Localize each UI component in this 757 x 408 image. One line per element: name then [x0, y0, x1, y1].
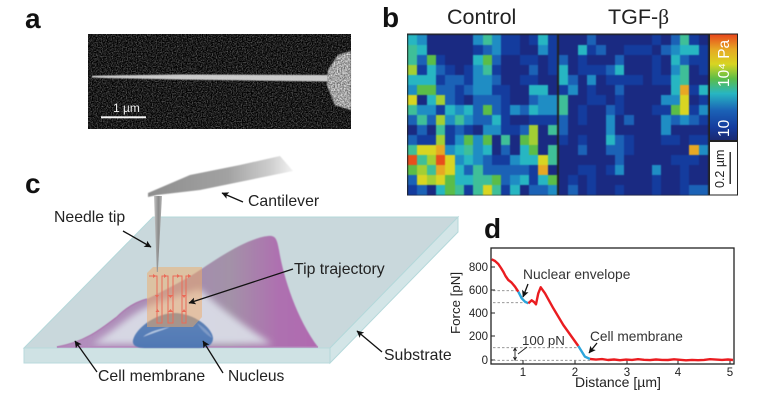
x tick labels: 3: [624, 367, 630, 379]
axis ticks: [491, 267, 730, 364]
heading TGF-β: TGF-β: [608, 5, 669, 29]
y tick labels: 600: [469, 285, 488, 297]
scan volume box: [147, 267, 202, 327]
y tick labels: 800: [469, 262, 488, 274]
panel label b: b: [382, 2, 399, 33]
colour bar: [710, 34, 737, 140]
nucleus: [133, 313, 213, 348]
scale bar 1 µm: 1 µm: [113, 101, 140, 115]
arrow: nuclear envelope: [523, 284, 528, 297]
arrow: cantilever: [222, 193, 243, 202]
cell membrane: [57, 236, 318, 347]
arrow: cell membrane: [75, 341, 97, 372]
arrow: needle tip: [123, 231, 151, 247]
substrate: [24, 217, 458, 363]
panel label d: d: [484, 213, 501, 244]
heatmap: TGF-β: [559, 34, 708, 194]
needle shaft: [92, 74, 328, 82]
colour bar: 10: [716, 119, 733, 137]
arrow: cell membrane: [589, 343, 597, 353]
plot frame: [491, 248, 734, 364]
y tick labels: 200: [469, 331, 488, 343]
label: needle tip: Needle tip: [54, 209, 125, 226]
scale bar 1 µm: [101, 101, 146, 118]
arrow: nucleus: [203, 341, 223, 373]
x tick labels: [520, 367, 733, 379]
label: tip trajectory: Tip trajectory: [294, 261, 385, 278]
heading Control: Control: [447, 5, 516, 29]
arrow: substrate: [357, 331, 382, 352]
panel a: SEM image of needle tip: [88, 34, 351, 129]
label: cantilever: Cantilever: [248, 193, 319, 210]
x tick labels: 4: [675, 367, 682, 379]
x axis title: Distance [µm]: [575, 374, 661, 390]
y axis title: Force [pN]: [448, 272, 463, 334]
scale bar 0.2 µm: 0.2 µm: [713, 150, 727, 188]
y tick labels: [469, 262, 488, 367]
tip trajectory: [149, 274, 191, 323]
scale bar 0.2 µm: [710, 142, 737, 194]
dashed reference lines: [493, 291, 590, 360]
label: cell membrane: Cell membrane: [98, 368, 205, 385]
colour bar: 10⁴ Pa: [716, 39, 733, 87]
y tick labels: 0: [482, 355, 488, 367]
y tick labels: 400: [469, 308, 488, 320]
panel label c: c: [25, 168, 41, 199]
x tick labels: 5: [727, 367, 733, 379]
needle base: [325, 50, 351, 111]
panel c: needle tip over cell on substrate: [24, 156, 458, 385]
panel d: force-distance chart: [448, 248, 734, 390]
label: 100 pN: 100 pN: [522, 333, 565, 348]
label: nuclear envelope: Nuclear envelope: [523, 267, 631, 282]
arrow: tip trajectory: [189, 269, 293, 303]
x tick labels: 1: [520, 367, 526, 379]
heatmap: Control: [408, 34, 557, 194]
x tick labels: 2: [572, 367, 578, 379]
frame of stiffness maps: [407, 34, 738, 196]
needle tip: [154, 196, 162, 272]
label: nucleus: Nucleus: [228, 368, 285, 385]
bracket: 100 pN: [514, 347, 527, 360]
force curve: [492, 259, 733, 360]
cantilever: [148, 156, 293, 197]
panel label a: a: [25, 3, 41, 34]
label: substrate: Substrate: [384, 347, 452, 364]
label: cell membrane: Cell membrane: [590, 329, 683, 344]
